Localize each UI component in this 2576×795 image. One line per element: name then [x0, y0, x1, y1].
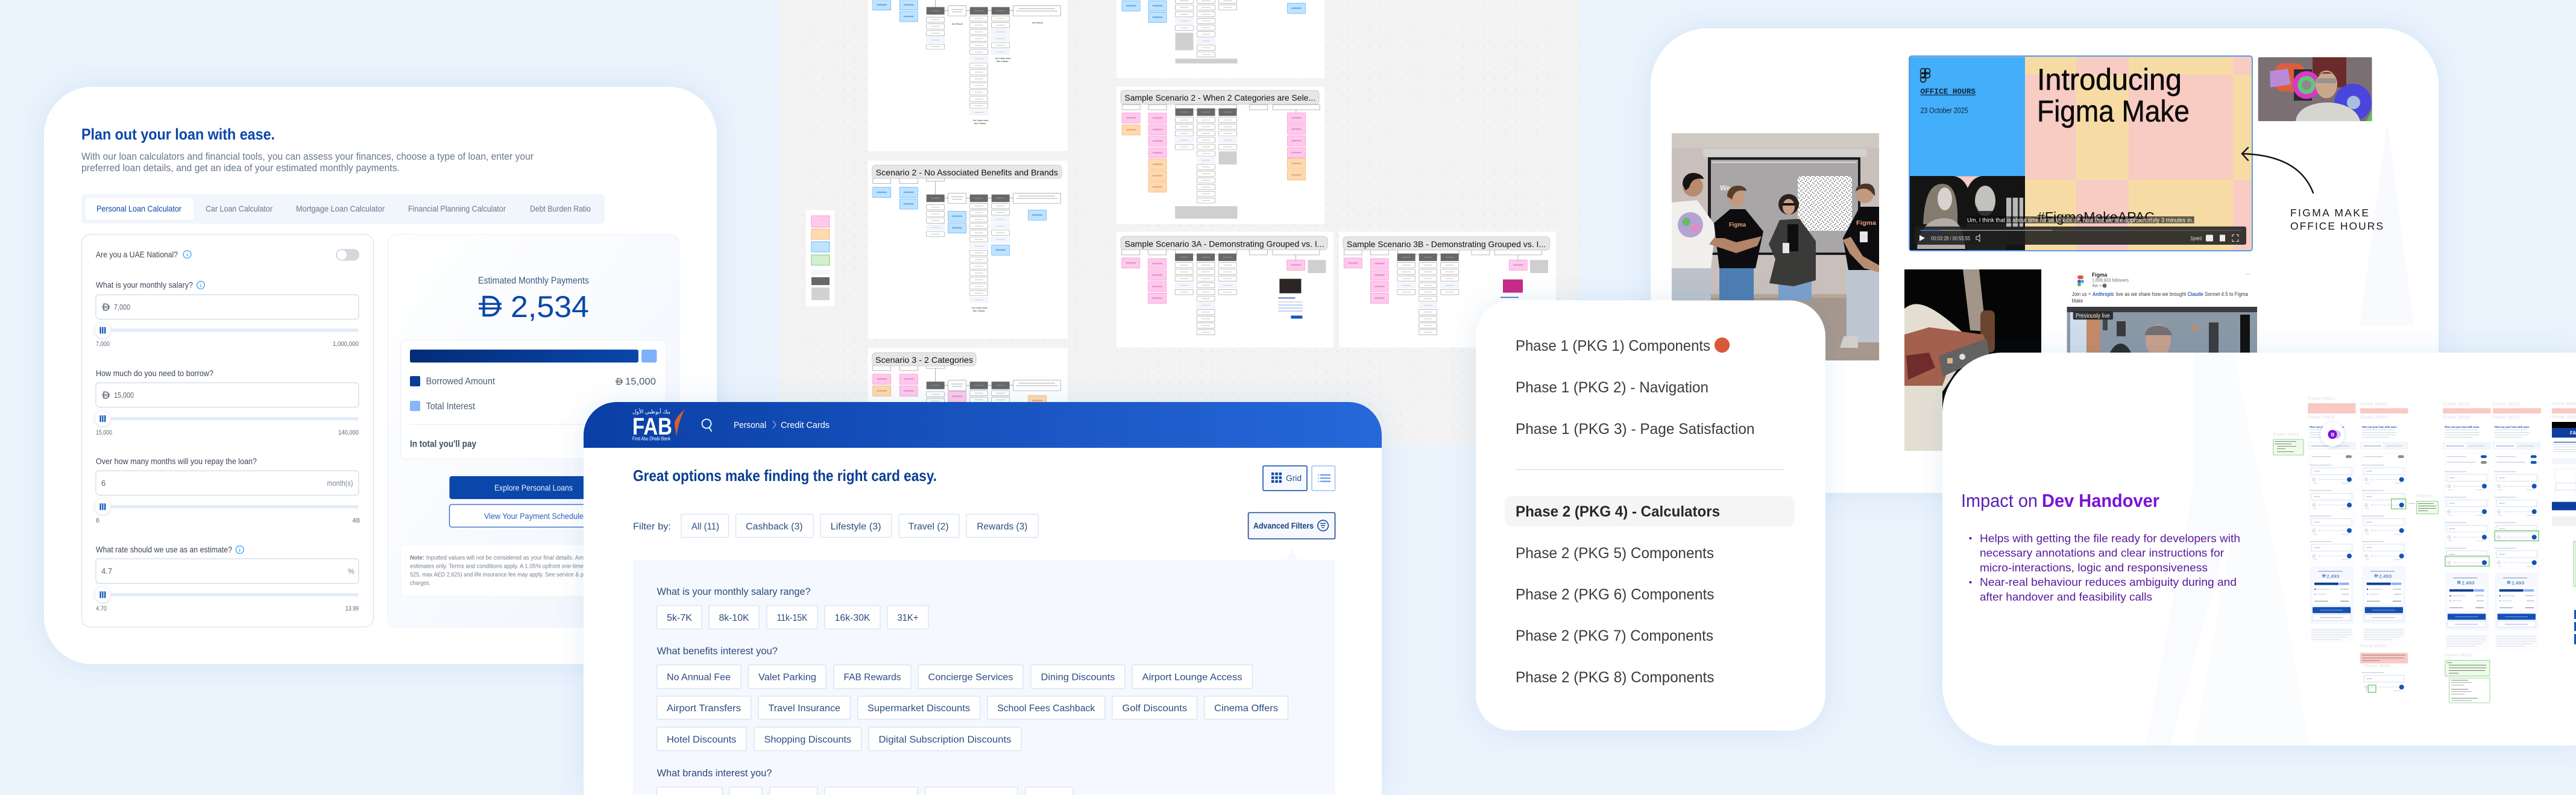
bullet list: necessary annotations and clear instructions for — [1980, 546, 2224, 559]
view toggle buttons: Grid — [1286, 473, 1302, 483]
frame: scenario 1 flow: this Criteria — [974, 122, 986, 125]
video controls — [1915, 227, 2246, 245]
mockup: frame 28520 — [2443, 401, 2491, 649]
estimated monthly payments: 2,534 — [511, 290, 589, 324]
frame: sample scenario 3A — [1116, 232, 1334, 347]
benefits question: Dining Discounts — [1041, 673, 1115, 682]
linkedin post: Join us + — [2072, 291, 2091, 297]
frame: scenario 2 no associated benefits and brands — [868, 161, 1068, 339]
phase 2 items: Phase 2 (PKG 7) Components — [1516, 627, 1713, 644]
calculator tabs: Debt Burden Ratio — [530, 204, 591, 213]
field: borrow amount: 140,000 — [338, 429, 359, 436]
linkedin post: Figma — [2092, 272, 2108, 278]
advanced filter panel — [633, 549, 1335, 795]
field: estimated rate: 4.70 — [96, 605, 107, 612]
calculator tabs: Car Loan Calculator — [206, 204, 272, 213]
frame: sample scenario 2 when 2 categories are selected: Sample Scenario 2 - When 2 Categories are Sele... — [1125, 93, 1315, 102]
legend panel — [806, 210, 834, 306]
livestream still — [2067, 307, 2257, 357]
mockup: frame 28520: Frame 28519 — [2443, 414, 2470, 419]
salary range question: 11k-15K — [776, 613, 808, 623]
field: borrow amount: How much do you need to borrow? — [96, 368, 213, 378]
mockup: frame 28522: Frame 28522 — [2493, 401, 2520, 406]
person: second in black tee: Figma — [1729, 222, 1746, 228]
label: figma make office hours: OFFICE HOURS — [2290, 220, 2383, 232]
panel: flowchart canvas — [779, 0, 1579, 489]
mockup: frame 28444: 2,493 — [2379, 573, 2392, 579]
person: right in black tee: Figma — [1856, 220, 1876, 227]
phase 2 items — [1505, 496, 1795, 686]
mockup: frame 28444 — [2360, 401, 2408, 643]
calculator form card — [82, 234, 374, 627]
heading: Impact on — [1961, 490, 2038, 511]
benefits question: What benefits interest you? — [657, 646, 778, 657]
benefits question: School Fees Cashback — [997, 703, 1095, 714]
benefits question: Digital Subscription Discounts — [879, 735, 1012, 745]
frame: scenario 1 flow: No Cards meet — [973, 119, 989, 122]
salary range question: 5k-7K — [667, 613, 693, 623]
mockup: frame 28522 — [2493, 401, 2541, 649]
benefits question: Shopping Discounts — [764, 735, 851, 745]
filter tabs: All (11) — [691, 522, 719, 532]
linkedin post: 1,898,903 followers — [2092, 278, 2129, 283]
icon: cursor avatar bubble: B — [2331, 432, 2334, 438]
note: frame 28523: Frame 28523 — [2445, 652, 2472, 658]
benefits question: No Annual Fee — [667, 673, 731, 682]
frame: scenario 2 no associated benefits and brands: this Criteria — [973, 310, 985, 312]
person: left in white tee — [1672, 173, 1716, 300]
header bar — [584, 402, 1382, 448]
livestream still: Previously live — [2076, 313, 2110, 319]
filter tabs: Travel (2) — [909, 522, 949, 532]
benefits question: Golf Discounts — [1123, 703, 1187, 714]
filter tabs: Filter by: — [633, 522, 671, 532]
field: monthly salary — [95, 280, 359, 348]
FAB logo: بنك أبوظبي الأول — [632, 408, 670, 415]
video controls: 00:03:28 / 00:55:55 — [1931, 235, 1970, 241]
brands question — [657, 768, 1073, 795]
note: slider buttons: Frame 2... — [2416, 493, 2437, 498]
calculator tabs: Mortgage Loan Calculator — [296, 204, 385, 213]
field: repayment months: 48 — [352, 517, 360, 524]
frame: sample scenario 1 flow — [1116, 0, 1324, 78]
panel: FAB credit cards page — [584, 402, 1382, 795]
icon: red ball — [1715, 338, 1730, 353]
action buttons: View Your Payment Schedule — [484, 511, 584, 521]
office hours label: 23 October 2025 — [1921, 106, 1968, 115]
mockup: frame 28522: Plan out your loan with ease. — [2495, 426, 2530, 429]
bullet list: micro-interactions, logic and responsiveness — [1980, 561, 2208, 574]
bullet list: Helps with getting the file ready for developers with — [1980, 532, 2240, 545]
field: estimated rate: 13.99 — [345, 605, 359, 612]
field: repayment months: 6 — [101, 479, 105, 488]
field: estimated rate: What rate should we use as an estimate? — [96, 545, 232, 555]
mockup: frame 28522: 2,493 — [2511, 580, 2524, 585]
office hours label — [1921, 87, 1976, 115]
linkedin post: Claude — [2188, 291, 2203, 297]
FAB logo: FAB — [632, 413, 672, 440]
field: repayment months: month(s) — [327, 479, 353, 488]
mockup: frame 28443: Frame 28439 — [2308, 414, 2335, 419]
presenter thumbnail — [2258, 57, 2372, 121]
video title: Figma Make — [2037, 95, 2190, 128]
caption: Um, I think that is about time for us to kick off, now that we are approximately 3 minutes in. — [1967, 217, 2193, 224]
linkedin post: Make — [2072, 298, 2083, 304]
frame: scenario 1 flow: No Cards meet — [995, 57, 1011, 60]
linkedin post: Anthropic — [2093, 291, 2114, 297]
heading: Dev Handover — [2042, 490, 2159, 511]
phase 2 items: Phase 2 (PKG 4) - Calculators — [1516, 503, 1720, 520]
mockup: frame 28443: 2,493 — [2326, 573, 2339, 579]
frame: scenario 2 no associated benefits and brands: No Cards meet — [972, 307, 987, 309]
video title — [2037, 63, 2190, 128]
mockup: frame 28443: Frame 28443 — [2308, 395, 2335, 401]
field: monthly salary: 7,000 — [114, 303, 130, 312]
checkerboard background — [2025, 57, 2252, 250]
benefits question: Travel Insurance — [768, 703, 840, 714]
breakdown box: Borrowed Amount — [426, 376, 495, 387]
hashtag: #FigmaMakeAPAC — [2037, 209, 2155, 225]
bullet list: after handover and feasibility calls — [1980, 591, 2152, 603]
linkedin post — [2067, 270, 2257, 357]
advanced filters button: Advanced Filters — [1253, 521, 1314, 530]
person: second in black tee — [1709, 186, 1763, 300]
disclaimer note: charges. — [410, 580, 430, 587]
action buttons: Explore Personal Loans — [494, 483, 573, 492]
note: default view: Frame 28515 — [2273, 432, 2299, 437]
intro paragraph: preferred loan details, and get an idea of your estimated monthly payments. — [81, 163, 400, 174]
field: monthly salary: 7,000 — [96, 341, 110, 348]
frame: sample scenario 3B: Sample Scenario 3B - Demonstrating Grouped vs. I... — [1347, 239, 1546, 249]
benefits question: FAB Rewards — [844, 673, 901, 682]
view toggle buttons — [1263, 466, 1335, 491]
estimated monthly payments — [478, 276, 589, 324]
filter tabs: Cashback (3) — [746, 522, 803, 532]
advanced filters button — [1249, 512, 1335, 539]
icon: figma colour logo — [2077, 275, 2084, 286]
benefits question: Hotel Discounts — [667, 735, 737, 745]
frame: scenario 1 flow: No Result — [1032, 21, 1043, 24]
mockup: frame 28444: Frame 28444 — [2360, 401, 2387, 406]
field: borrow amount: 15,000 — [96, 429, 112, 436]
bullet list: Near-real behaviour reduces ambiguity during and — [1980, 576, 2237, 588]
field: repayment months — [95, 456, 360, 524]
phase 1 items: Phase 1 (PKG 1) Components — [1516, 338, 1710, 354]
calculator tabs: Personal Loan Calculator — [96, 204, 181, 213]
frame: sample scenario 2 when 2 categories are selected — [1116, 87, 1324, 224]
linkedin post: live as we share how we brought — [2116, 291, 2186, 297]
filter tabs: Lifestyle (3) — [831, 522, 881, 532]
field: UAE national toggle — [96, 249, 359, 260]
salary range question: What is your monthly salary range? — [657, 586, 811, 597]
disclaimer note: Note: Inputted values will not be considered as your final details. Am — [410, 555, 584, 562]
frame: sample scenario 3A: Sample Scenario 3A - Demonstrating Grouped vs. I... — [1125, 239, 1324, 248]
benefits question: Valet Parking — [758, 673, 816, 682]
breadcrumb: Credit Cards — [781, 420, 830, 430]
calculator tabs — [81, 194, 605, 224]
photo: team on stage: We — [1720, 184, 1731, 192]
video title: Introducing — [2037, 63, 2182, 96]
photo: team on stage — [1672, 133, 1879, 360]
mockup: frame 28444: Frame 28516 — [2360, 414, 2387, 419]
video controls: Speed — [2191, 235, 2202, 241]
disclaimer note: 525, max AED 2,625) and life insurance fee may apply. See service & p — [410, 571, 584, 579]
mockup: frame 28514 slider: Frame 28305 — [2364, 663, 2391, 668]
mockup: frame 28514 slider — [2360, 643, 2408, 693]
intro paragraph — [81, 151, 534, 174]
field: estimated rate: % — [348, 567, 354, 576]
person: right in black tee — [1840, 184, 1879, 348]
field: UAE national toggle: Are you a UAE National? — [96, 250, 178, 259]
estimated monthly payments: Estimated Monthly Payments — [478, 276, 589, 286]
office hours label: OFFICE HOURS — [1921, 87, 1976, 96]
heading — [1961, 490, 2159, 511]
results card — [388, 234, 679, 627]
frame: scenario 1 flow — [868, 0, 1068, 151]
phase 1 items: Phase 1 (PKG 3) - Page Satisfaction — [1516, 421, 1754, 438]
breakdown box: In total you'll pay — [410, 439, 476, 450]
field: repayment months: Over how many months will you repay the loan? — [96, 456, 257, 466]
disclaimer note — [401, 544, 666, 596]
filter tabs — [633, 514, 1038, 538]
field: repayment months: 6 — [96, 517, 99, 524]
arrow: to video — [2242, 148, 2313, 193]
panel: Figma office hours — [1651, 28, 2439, 493]
mockup: frame 28443: Plan out your loan with ease. — [2310, 426, 2345, 429]
benefits question: Cinema Offers — [1214, 703, 1278, 714]
breakdown box: Total Interest — [426, 401, 475, 412]
disclaimer note: estimates only. Terms and conditions apply. A 1.05% upfront one-time — [410, 563, 584, 570]
salary range question: 8k-10K — [719, 613, 749, 623]
field: borrow amount — [95, 368, 359, 436]
frame: scenario 2 no associated benefits and brands: Scenario 2 - No Associated Benefits and Brands — [876, 168, 1058, 177]
mockup: frame 28444: Plan out your loan with ease. — [2362, 426, 2397, 429]
filter tabs: Rewards (3) — [977, 522, 1027, 532]
linkedin post: 4w • — [2092, 283, 2101, 288]
note: default view — [2273, 432, 2304, 455]
heading: plan out your loan: Plan out your loan with ease. — [81, 125, 275, 143]
salary range question: 31K+ — [897, 613, 919, 623]
photo: hand holding badge — [1904, 269, 2041, 451]
phase 1 items — [1516, 338, 1754, 438]
frame: sample scenario 3B — [1339, 232, 1556, 347]
note: slider buttons — [2408, 493, 2438, 514]
phase 2 items: Phase 2 (PKG 8) Components — [1516, 669, 1715, 686]
breadcrumb — [734, 420, 830, 430]
label: figma make office hours: FIGMA MAKE — [2290, 207, 2369, 219]
mockup: frame 28520: 2,493 — [2461, 580, 2474, 585]
mockup: frame 28443 — [2308, 395, 2356, 643]
breadcrumb: Personal — [734, 420, 766, 430]
mockup: frame 28522: Frame 28521 — [2493, 414, 2520, 419]
intro paragraph: With our loan calculators and financial tools, you can assess your finances, choose a type of loan, enter your — [81, 151, 534, 162]
field: monthly salary: What is your monthly salary? — [96, 280, 193, 289]
icon: search — [702, 419, 711, 432]
benefits question: Supermarket Discounts — [868, 703, 970, 714]
FAB logo: First Abu Dhabi Bank — [632, 436, 671, 441]
salary range question — [657, 586, 928, 629]
panel: loan calculator — [44, 87, 717, 664]
brands question: What brands interest you? — [657, 768, 772, 779]
field: monthly salary: 1,000,000 — [333, 341, 359, 348]
breakdown box: 15,000 — [625, 377, 656, 387]
frame: scenario 3 categories: Scenario 3 - 2 Categories — [875, 355, 973, 365]
phase 1 items: Phase 1 (PKG 2) - Navigation — [1516, 379, 1708, 396]
phase 2 items: Phase 2 (PKG 5) Components — [1516, 545, 1714, 562]
benefits question: Concierge Services — [928, 673, 1013, 682]
phase 2 items: Phase 2 (PKG 6) Components — [1516, 586, 1715, 603]
mockup: frame 28520: Plan out your loan with ease. — [2445, 426, 2480, 429]
presenters portraits — [1910, 176, 2025, 250]
linkedin post: ... — [2246, 270, 2250, 275]
icon: figma logo — [1921, 69, 1930, 82]
panel: phase list — [1476, 300, 1825, 731]
mockup: frame 28431 mobile view: Frame 2843 — [2552, 414, 2576, 419]
field: borrow amount: 15,000 — [114, 391, 134, 400]
salary range question: 16k-30K — [834, 613, 871, 623]
video: introducing Figma Make — [1909, 56, 2252, 251]
field: estimated rate — [95, 545, 359, 612]
benefits question — [657, 646, 1288, 751]
heading: great options: Great options make finding the right card easy. — [633, 467, 937, 485]
frame: scenario 3 categories — [868, 348, 1068, 489]
mockup: frame 28431 mobile view: Frame 2844 — [2552, 401, 2576, 406]
bullet list — [1969, 532, 2240, 603]
panel: impact on dev handover — [1942, 353, 2576, 746]
action buttons — [450, 476, 617, 527]
calculator tabs: Financial Planning Calculator — [408, 204, 506, 213]
linkedin post: Sonnet 4.5 to Figma — [2205, 291, 2249, 297]
frame: scenario 1 flow: No Result — [952, 22, 963, 25]
label: figma make office hours — [2290, 207, 2383, 232]
note: frame 28523 — [2445, 652, 2490, 703]
icon: cursor avatar bubble — [2320, 423, 2345, 447]
mockup: frame 28431 mobile view — [2552, 401, 2576, 644]
mockup: frame 28520: Frame 28520 — [2443, 401, 2470, 406]
breakdown box — [401, 340, 666, 459]
benefits question: Airport Transfers — [667, 703, 741, 714]
person: woman with microphone — [1769, 194, 1816, 300]
benefits question: Airport Lounge Access — [1142, 673, 1242, 682]
frame: scenario 1 flow: this Criteria — [997, 60, 1009, 63]
mockup: frame 28514 slider: Frame 28514 — [2360, 643, 2387, 649]
field: estimated rate: 4.7 — [101, 567, 112, 576]
